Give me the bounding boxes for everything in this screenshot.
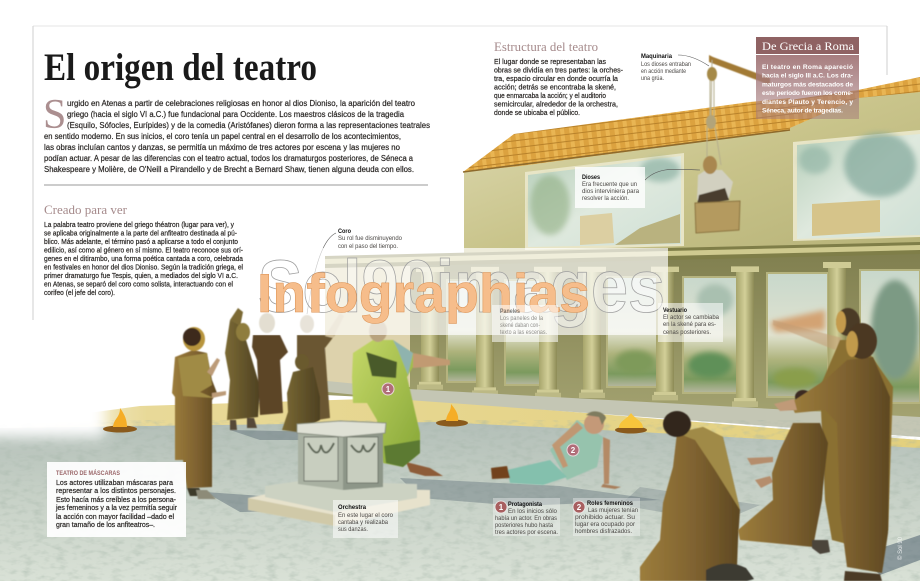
figure: front kneeling chorus member [640, 411, 754, 581]
callout: Vestuario [658, 303, 723, 342]
panel: De Grecia a Roma: hacia el siglo III a.C. Los dra- [762, 72, 853, 80]
section: Estructura del teatro: semicircular, alrededor de la orchestra, [494, 102, 618, 108]
section: Creado para ver: La palabra teatro proviene del griego théatron (lugar para ver), y [44, 222, 234, 229]
section: Estructura del teatro [494, 40, 624, 117]
section: Creado para ver: blico. Más adelante, el término pasó a aplicarse a todo el conjunto [44, 239, 238, 246]
callout: Maquinaria: Maquinaria [641, 54, 673, 60]
figure: chorus member standing [252, 313, 288, 415]
panel: De Grecia a Roma [756, 37, 859, 119]
marker 2: 2 [571, 446, 576, 455]
callout: Orchestra [333, 500, 398, 538]
callout: Maquinaria: una grúa. [641, 76, 664, 82]
intro text: en sentido moderno. En sus inicios, el coro tenía un papel central en el desarrollo de los acontecimientos, [44, 132, 401, 141]
panel: De Grecia a Roma: El teatro en Roma apareció [762, 64, 853, 71]
callout: Coro: Coro [338, 229, 351, 235]
figure: chorus member with raised arm [225, 308, 260, 430]
intro text: urgido en Atenas a partir de celebraciones religiosas en honor al dios Dioniso, la aparición del teatro [67, 99, 416, 108]
lower murals [447, 270, 920, 403]
icon: fire bowl center [436, 404, 468, 426]
panel: Teatro de máscaras: Los actores utilizaban máscaras para [56, 480, 173, 487]
watermark: Infographias: Infographias [257, 262, 590, 324]
callout: Dioses: Dioses [582, 175, 601, 181]
section: Estructura del teatro: que enmarcaba la acción; y el auditorio [494, 93, 606, 100]
callout: Orchestra: Orchestra [338, 505, 367, 511]
section: Creado para ver: edilicio, así como al género en sí mismo. El teatro reconoce sus orí- [44, 248, 244, 254]
scene: pavement and steps [0, 381, 920, 581]
callout: Protagonista: tres actores por escena. [495, 530, 558, 536]
section: Estructura del teatro: acción; detrás se encontraba la skené, [494, 84, 616, 92]
marker 1: 1 [386, 385, 391, 394]
callout: Roles femeninos: lugar era ocupado por [575, 522, 635, 528]
figure: altar [248, 421, 430, 526]
section: Estructura del teatro: obras se dividía en tres partes: la orches- [494, 68, 624, 74]
panel: Teatro de máscaras [47, 462, 186, 537]
callout: Protagonista [493, 498, 560, 536]
heading: TEATRO DE MÁSCARAS [56, 470, 120, 477]
section: Creado para ver: corifeo (el jefe del coro). [44, 290, 115, 297]
callout: Dioses: resolver la acción. [582, 196, 629, 202]
callout: Paneles: Los paneles de la [500, 316, 544, 322]
figure: chorus member left [172, 327, 226, 499]
upper wall [464, 88, 920, 258]
figure: chorus member gesturing [297, 313, 344, 420]
intro text: (Esquilo, Sófocles, Eurípides) y de la comedia (Aristófanes) dieron forma a las representaciones teatrales [67, 121, 430, 130]
callout: Orchestra: cantaba y realizaba [338, 520, 389, 526]
intro text: las obras incluían cantos y danzas, se permitía un máximo de tres actores por escena y las mujeres no [44, 143, 401, 152]
leader lines [307, 55, 709, 314]
callout: Maquinaria: en acción mediante [641, 69, 687, 75]
callout: Protagonista: Protagonista [508, 502, 543, 508]
callout: Paneles: texto a las escenas. [500, 330, 547, 336]
marker 1 [382, 383, 394, 395]
panel: Teatro de máscaras: representar a los distintos personajes. [56, 488, 176, 495]
callout: Protagonista: posteriores hubo hasta [495, 523, 554, 529]
callout: Paneles: Paneles [500, 309, 521, 315]
title: El origen del teatro [44, 46, 317, 89]
number badge 2: 2 [577, 503, 582, 512]
callout: Vestuario: El actor se cambiaba [663, 315, 720, 321]
callout: Coro [338, 229, 403, 250]
heading: Estructura del teatro [494, 40, 598, 54]
section: Creado para ver: en Atenas, se separó del coro como solista, interactuando con el [44, 282, 233, 288]
beige left wall [325, 262, 410, 387]
crane beam [709, 55, 770, 85]
upper murals [525, 130, 920, 250]
panel: De Grecia a Roma: maturgos más destacados de [762, 82, 853, 88]
callout: Protagonista: había un actor. En obras [495, 516, 557, 522]
panel: De Grecia a Roma: De Grecia a Roma [762, 39, 855, 53]
mural foliage [615, 280, 919, 388]
figure: kneeling chorus member right [738, 390, 830, 554]
callout: Roles femeninos: prohibido actuar. Su [575, 515, 635, 521]
figure: actor in basket with crane [695, 55, 770, 233]
figures: chorus left group [172, 308, 344, 499]
panel: De Grecia a Roma: diantes Plauto y Terencio, y [762, 99, 853, 106]
intro text: griego (hacia el siglo VI a.C.) fue fundacional para Occidente. Los maestros clásicos de la tragedia [67, 110, 405, 119]
callout: Orchestra: En este lugar el coro [338, 513, 394, 519]
actor [697, 170, 733, 200]
callout: Roles femeninos [573, 498, 640, 536]
basket [695, 201, 740, 233]
figure: back standing chorus member [773, 308, 893, 550]
callout: Paneles [492, 305, 558, 342]
cornice [325, 242, 920, 268]
frame lines [33, 26, 887, 320]
section: Creado para ver: genes en el ditirambo, una forma poética cantada a coro, celebrada [44, 256, 243, 263]
roof [463, 77, 920, 172]
callout: Maquinaria: Los dioses entraban [641, 62, 691, 68]
callout: Vestuario: cenas posteriores. [663, 330, 711, 336]
drop cap: S [43, 92, 66, 138]
panel: De Grecia a Roma: este período fueron los come- [762, 90, 853, 97]
callout: Maquinaria [641, 54, 691, 82]
marker 2 [567, 444, 579, 456]
icon: fire bowl left [103, 408, 137, 432]
heading: Creado para ver [44, 202, 128, 217]
section: Estructura del teatro: donde se ubicaba el público. [494, 110, 580, 117]
callout: Dioses: dios interviniera para [582, 189, 640, 195]
watermark wash [252, 248, 668, 335]
section: Creado para ver: primer dramaturgo fue Tespis, quien, a mediados del siglo VI a.C. [44, 273, 238, 280]
callout: Paneles: skené daban con- [500, 323, 540, 329]
icon: fire bowl right [615, 413, 647, 434]
callout: Orchestra: sus danzas. [338, 527, 368, 533]
section: Creado para ver: en festivales en honor del dios Dioniso. Según la tradición griega, el [44, 264, 243, 272]
panel: Teatro de máscaras: la acción con mayor facilidad –dado el [56, 514, 174, 521]
pulleys [707, 67, 717, 81]
figure: front standing chorus member [774, 323, 890, 581]
callout: Coro: Su rol fue disminuyendo [338, 236, 403, 242]
callout: Protagonista: En los inicios sólo [508, 509, 558, 515]
watermark: Sol90images: Sol90images [258, 245, 665, 328]
figure: fallen actor in teal [491, 411, 621, 489]
section: Estructura del teatro: El lugar donde se representaban las [494, 59, 606, 66]
panel: Teatro de máscaras: gran tamaño de los anfiteatros–. [56, 522, 155, 529]
figure: chorus member kneeling [282, 354, 320, 432]
intro text: Shakespeare y Molière, de O'Neill a Pirandello y de Brecht a Bernard Shaw, tienen alguna deuda con ellos. [44, 165, 414, 174]
callout: Roles femeninos: Roles femeninos [587, 501, 634, 507]
callout: Coro: con el paso del tiempo. [338, 244, 398, 250]
header [756, 37, 859, 54]
panel: Teatro de máscaras: Esto hacía más creíbles a los persona- [56, 497, 177, 504]
callout: Vestuario: Vestuario [663, 308, 687, 314]
intro text [43, 92, 430, 174]
panel: Teatro de máscaras: jes femeninos y a la vez permitía seguir [55, 505, 178, 512]
callout: Vestuario: en la skené para es- [663, 322, 716, 328]
section: Creado para ver: se aplicaba originalmente a la parte del anfiteatro destinada al pú- [44, 230, 238, 238]
callout: Roles femeninos: hombres disfrazados. [575, 529, 632, 535]
panel: De Grecia a Roma: Séneca, autor de tragedias. [762, 108, 843, 114]
callout: Dioses: Era frecuente que un [582, 182, 637, 188]
section: Estructura del teatro: tra, espacio circular en donde ocurría la [494, 76, 618, 83]
section: Creado para ver [44, 202, 244, 297]
callout: Roles femeninos: Las mujeres tenían [588, 508, 638, 514]
columns [416, 262, 851, 412]
scene: building [325, 77, 920, 425]
number badge 1: 1 [499, 503, 504, 512]
credit: © Sol 90 [897, 536, 904, 560]
callout: Dioses [575, 167, 645, 208]
lower storey [325, 246, 920, 425]
intro text: podían actuar. A pesar de las diferencias con el teatro actual, todos los dramaturgos posteriores, de Séneca a [44, 154, 414, 163]
figure: protagonist in green [352, 320, 450, 476]
